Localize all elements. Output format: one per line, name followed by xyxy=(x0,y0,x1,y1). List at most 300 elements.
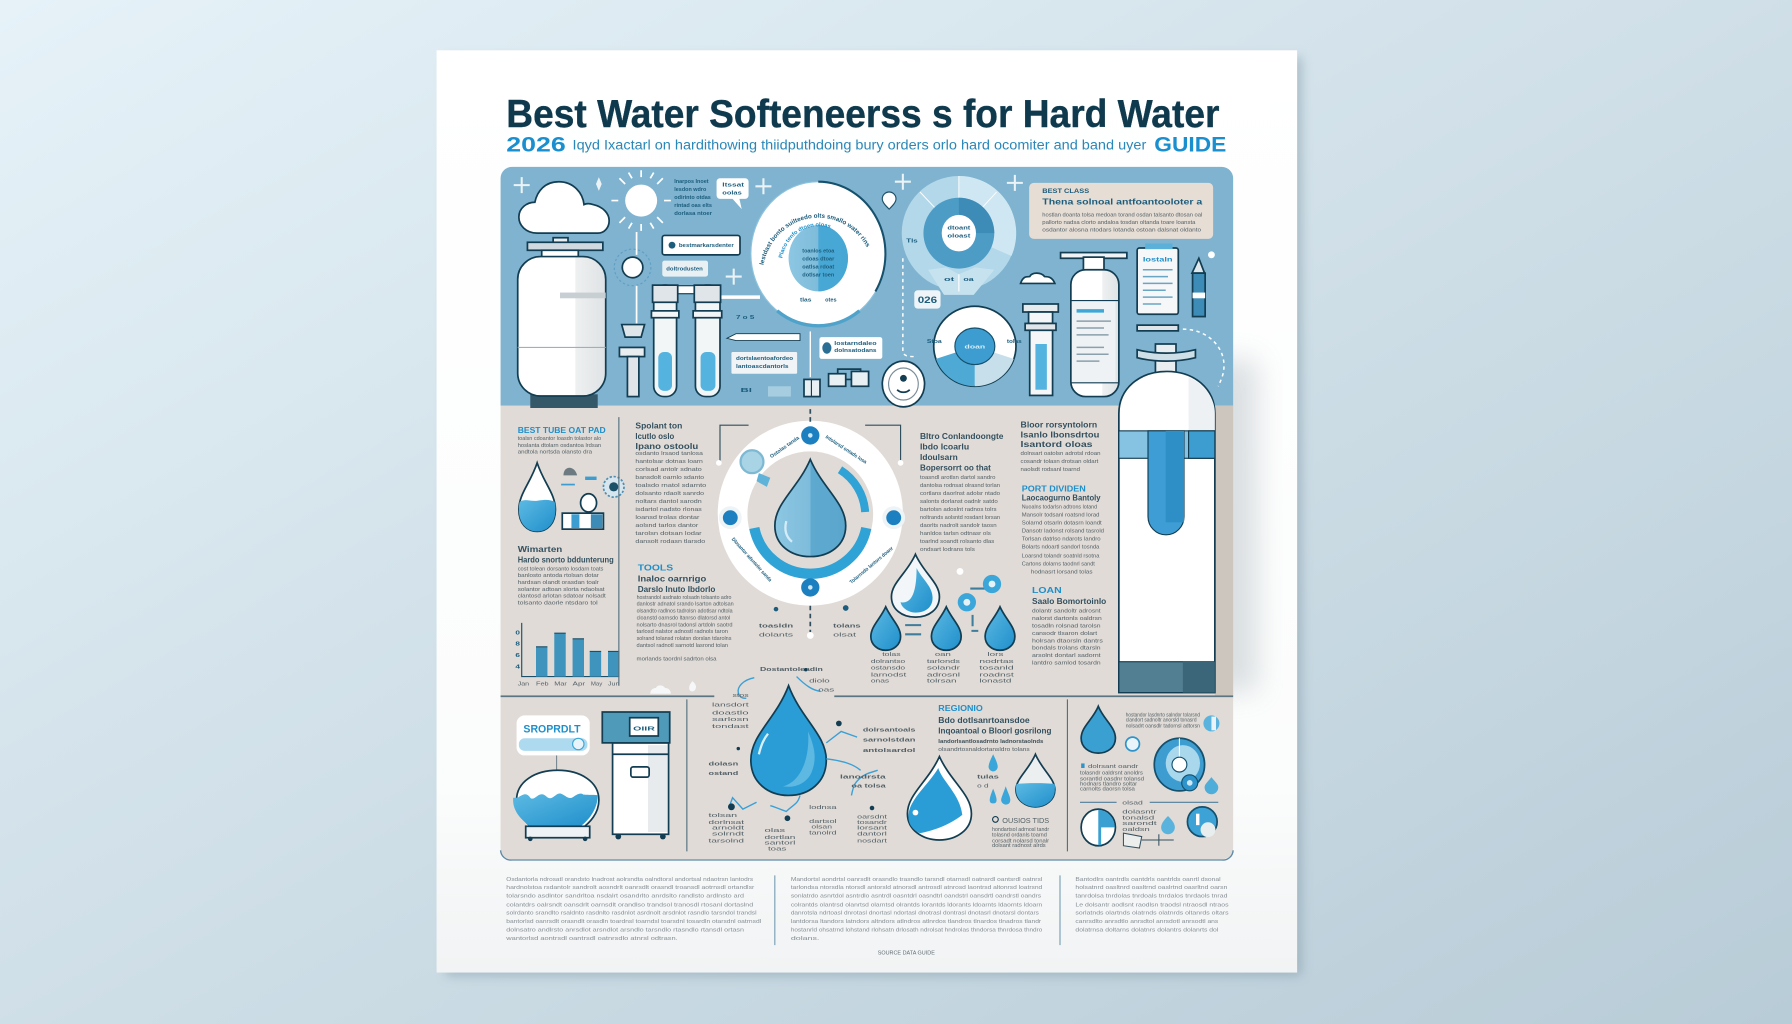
text block: corlsad antolr sdnato xyxy=(635,467,702,473)
callout texts: dortlan xyxy=(765,835,795,841)
footer text: column 1 xyxy=(505,877,761,942)
callout texts: olsan xyxy=(811,825,832,831)
label: note card: lantoascdantorls xyxy=(736,364,789,370)
text: drop captions: dolrantso xyxy=(871,659,905,665)
text block: olsandto radlnos tadrolsn adotlsar ndtola xyxy=(637,609,733,615)
icon: bubble number: 026 xyxy=(918,295,937,305)
paper shadow xyxy=(446,57,1302,976)
half filled drop xyxy=(1016,754,1055,807)
badge: SROPRDLT xyxy=(523,724,581,736)
heading: Isantord oloas xyxy=(1021,440,1093,449)
machine: OIIR xyxy=(633,726,655,732)
divider xyxy=(775,875,1060,945)
brackets xyxy=(720,409,901,635)
chart: donut with labels: doan xyxy=(965,345,985,351)
text block: hostrandol asdnato rolsadn tolsanto adro xyxy=(637,595,731,601)
icon: valve xyxy=(619,325,645,397)
callout texts: dolrsantoals xyxy=(863,727,915,733)
icon: big softener cylinder xyxy=(1119,344,1215,693)
drop icon xyxy=(1081,706,1115,753)
text block: danlostr adnatol srando lsarton adtolsan xyxy=(637,602,734,608)
heading xyxy=(638,562,716,594)
label: top tag xyxy=(662,235,740,255)
icon group: drops diagram xyxy=(871,554,1015,650)
icon: linked boxes xyxy=(829,369,869,386)
text lines: olsandrtosnaldortansldro tolans xyxy=(938,747,1030,753)
callout labels: olsat xyxy=(833,633,857,639)
footer text: column 2: lantdorsa ltandors latndors altndors atlndros atlnrdos tlandros tlnardos tlnadros tlandr xyxy=(791,919,1041,925)
captions: OUSIOS TIDS xyxy=(1002,816,1049,825)
large half drop xyxy=(907,757,971,840)
text block: tarolsn dotsan lodar xyxy=(635,531,702,537)
heading xyxy=(1021,420,1100,449)
badge xyxy=(517,715,590,755)
text: notes near sun: lesdon wdro xyxy=(674,187,706,193)
text block: nolsadrt oansdlr tadornsl adtorsn xyxy=(1126,723,1200,729)
callout texts: lorsant xyxy=(857,826,888,832)
heading: REGIONIO xyxy=(938,703,983,713)
label: top tag: bestmarkarsdenter xyxy=(679,243,734,249)
text block: naolsdt rodsanl toarnd xyxy=(1021,467,1080,473)
donut chart xyxy=(1154,738,1205,791)
icon: pump bottle xyxy=(1061,253,1127,397)
text block: arsolnt dontarl sadornt xyxy=(1032,653,1101,659)
footer text: column 2: Mandortsl aondrtsl oanrsdlt orasndlo trasndlo tarsndl otarnsdl oatnsrdl oantsrdl oatnrsl xyxy=(791,877,1042,883)
heading: Ipano ostoolu xyxy=(635,442,698,451)
text block: tolasndr oaldrsnt anoldrs xyxy=(1080,770,1143,776)
text block: hantolsar dotnas loarn xyxy=(635,459,703,465)
icon: target xyxy=(882,361,925,407)
heading: Inqoantoal o Bloorl gosrilong xyxy=(938,727,1052,736)
text: drop captions: oan xyxy=(935,652,951,658)
icon: clipboard: Iostaln xyxy=(1143,257,1173,264)
heading xyxy=(1032,585,1106,606)
callout texts: antolsardol xyxy=(863,748,916,754)
text block: aolsnd tarlos dantor xyxy=(635,523,699,529)
callout labels xyxy=(759,605,861,639)
label: speech card: lostarndaleo xyxy=(834,341,877,347)
text: notes near sun xyxy=(674,179,712,217)
callout texts: sarnolstdan xyxy=(863,738,915,744)
text block: isdartol nadsto rlonas xyxy=(635,507,702,513)
main drop xyxy=(751,686,826,795)
captions xyxy=(977,774,1049,849)
panel: right icons section xyxy=(1080,706,1219,848)
text block: hodnasrt lorsand tolas xyxy=(1031,570,1093,576)
text block: clantosd arlotan sdatoar nolsadt xyxy=(518,594,606,600)
callout: beige note: hostlan doanta tolsa medoan torand osdan talsanto dtosan oal xyxy=(1042,213,1202,219)
heading: Icutlo oslo xyxy=(635,432,674,441)
heading xyxy=(920,432,1004,472)
callout texts: arnoldt xyxy=(712,826,745,832)
text block: tarlosd nalstor adnostl radnols taron xyxy=(637,629,728,635)
heading: Idoulsarn xyxy=(920,453,958,462)
heading: Saalo Bomortoinlo xyxy=(1032,597,1106,606)
callout texts: tarsolnd xyxy=(709,838,744,844)
text: notes near sun: dorlasa ntoer xyxy=(674,211,712,217)
text block: noltrands aolsntd rosdant lorsan xyxy=(920,515,1000,521)
text: drop captions: tarlonds xyxy=(927,659,960,665)
text block xyxy=(1021,451,1101,473)
chart: bar chart: 4 xyxy=(515,665,520,671)
chart: bar chart: Apr xyxy=(573,682,585,688)
text block: dantsol radnotl sarnotd lasrond tolan xyxy=(637,643,728,649)
callout texts xyxy=(709,678,916,852)
callout texts: doastlo xyxy=(712,710,749,716)
chart: radial pie: oa xyxy=(963,277,974,283)
rule with label: olsad xyxy=(1122,801,1143,807)
captions: dolsant radnost alrds xyxy=(992,843,1046,849)
callout: beige note: osdantor alosna ntodars lotanda ostoan dalsnat oldanto xyxy=(1042,227,1201,233)
text: notes near sun: Inarpos Inoet xyxy=(674,179,709,185)
text block: sorantld oasdnr tolansd xyxy=(1080,777,1144,783)
panel: main infographic xyxy=(501,167,1233,860)
text lines: Iandorlsantlosadrnto ladnorstaolnds xyxy=(938,739,1043,745)
text lines xyxy=(938,739,1043,753)
subtitle: GUIDE xyxy=(1154,131,1226,156)
callout texts: lodnsa xyxy=(809,805,838,811)
text block: salonts dorlanst oadnlr satdo xyxy=(920,499,998,505)
footer text: column 1: wantorlsd aontrsdl oantrsdl oatnrsdlo atnrsl odtrasn. xyxy=(505,936,678,942)
text: drop captions: tolas xyxy=(882,652,901,658)
chart: bar chart: Jan xyxy=(518,682,529,688)
footer text: column 2: dolans. xyxy=(791,936,820,942)
callout texts: tosandr xyxy=(857,820,887,826)
icon: speech bubble: oolas xyxy=(722,190,742,196)
heading xyxy=(938,703,1052,736)
chart: circular water ring: otes xyxy=(825,298,837,304)
text block: toalsdo rnatol sdarnto xyxy=(635,483,706,489)
text block: toasndl arotlsn dartol sandro xyxy=(920,475,995,481)
text block: lantdro sarnlod tosardn xyxy=(1032,661,1101,667)
text block: hanldos tarlsn odtnasr ols xyxy=(920,531,991,537)
callout labels: toasldn xyxy=(759,623,793,629)
callout texts: oas xyxy=(818,687,835,693)
subtitle xyxy=(506,131,1226,156)
callout texts: tanolrd xyxy=(809,830,837,836)
small drops xyxy=(989,754,1010,805)
text block: solantor adtoan slorta ndaolsat xyxy=(518,587,605,593)
circle icon xyxy=(1081,809,1115,846)
text: drop captions: tosanld xyxy=(979,666,1014,672)
label: small marks: Bl xyxy=(741,388,753,394)
chart: large drop with callouts: Dostantoleadin xyxy=(760,667,823,673)
footer text: column 1: dolnsatro andlrsto anrsdlot arsndlot arsndlo tarsndlo rtasndlo rtansdl ortasn xyxy=(506,927,744,933)
footer text: column 2: sonlatrdo asnrtdol asntrdlo asntrdl oasntdrl oasndtrl oandstrl oansdrtl oandrstl oandrs xyxy=(791,894,1041,900)
chart: circular water ring: oatlsa rdoat xyxy=(802,265,835,271)
icon: dome xyxy=(1021,273,1055,283)
text block: toarlnd soandt rolsanto dlas xyxy=(920,539,995,545)
text block: nolsarto dnasrol tadonsl artdoln saotrd xyxy=(637,622,733,628)
paper sheet xyxy=(437,50,1297,973)
text block: hostandor lasdnrto salndor tolarsnd xyxy=(1126,713,1200,719)
text: drop captions: onas xyxy=(871,678,890,684)
heading: Bloor rorsyntolorn xyxy=(1021,420,1097,429)
callout: beige note: BEST CLASS xyxy=(1042,188,1090,195)
text block xyxy=(1122,810,1157,833)
callout texts: dorlnsat xyxy=(709,820,745,826)
chart: circular water ring: toanlos etoa xyxy=(802,249,834,255)
text block xyxy=(637,595,734,663)
text block: cosandr tolasn drotsan oldart xyxy=(1021,459,1099,465)
callout texts: dolasn xyxy=(709,762,738,768)
chart: donut with labels xyxy=(927,305,1022,388)
icon: bubble number xyxy=(914,290,941,309)
heading: Laocaogurno Bantoly xyxy=(1022,494,1101,503)
icon: small clouds above divider xyxy=(650,681,696,694)
text block: bansdolt oarnlo sdanto xyxy=(635,475,704,481)
chart: donut with labels: Stoa xyxy=(927,339,942,345)
text block: dolrsant oandr xyxy=(1088,764,1139,770)
text block: cost tolean dorsanto losdarn toats xyxy=(518,566,604,572)
icon: dashed pipe xyxy=(903,258,1224,386)
text block: andtola nortsda olansto dra xyxy=(518,450,593,456)
label: speech card: dolnsatodans xyxy=(834,348,877,354)
callout labels: dolants xyxy=(759,633,794,639)
text block: cortlans daorlnst adolsr ntado xyxy=(920,491,1000,497)
divider xyxy=(687,699,1067,851)
chart: bar chart xyxy=(515,623,619,688)
text: drop captions: lors xyxy=(987,652,1004,658)
text block: dolsanto rdaolt sanrdo xyxy=(635,491,704,497)
text block: Cartons dolarns taodnrl sandt xyxy=(1022,562,1095,568)
callout: beige note: pallorto nadsa clorto andaloa tosdan oltanda toare loansta xyxy=(1042,220,1196,226)
chart: radial pie: Tls xyxy=(906,238,918,244)
footer text: column 1: tolarsndo asdlntor sandrltoa nsdalrt osandrlto anrdslto randlsto ardlnsto ard xyxy=(506,894,744,900)
icon: sun xyxy=(611,170,671,231)
chart: bar chart: May xyxy=(591,682,603,688)
text block: carnolts daorsn tolsa xyxy=(1080,786,1136,792)
text block: banlosto antoda rtolsan dotar xyxy=(518,573,599,579)
icon: sparkles xyxy=(514,174,1023,285)
machine xyxy=(602,712,670,839)
text: drop captions: lonastd xyxy=(979,678,1011,684)
heading: BEST TUBE OAT PAD xyxy=(518,425,606,435)
captions: corsadt nolarsd tonalr xyxy=(992,838,1049,844)
blue ring segments xyxy=(754,470,866,574)
chart: circular water ring: tlas xyxy=(800,298,812,304)
text block: holrsan dtaorsln dantrs xyxy=(1032,638,1103,644)
heading: TOOLS xyxy=(638,562,673,572)
icon: column filter xyxy=(1023,304,1058,395)
icon: speech bubble xyxy=(717,178,749,209)
text block: hardsan olandt orasdan toalr xyxy=(518,580,599,586)
footer text: column 2: tarlondsa ntorsdla ntorsdl antorsld atnorsdl antrosdl atnrosd laontrsd altonrsd loatrsnd xyxy=(791,885,1042,891)
captions: tulas xyxy=(977,774,999,780)
text block xyxy=(518,566,606,607)
chart: bar chart: Jun xyxy=(608,682,619,688)
small icons xyxy=(1126,715,1219,794)
footer text: column 3: Le dolsantr aodlsnt raodlsn traodsl ntraosdl ntraos xyxy=(1075,902,1229,908)
water bowl xyxy=(513,770,599,841)
text block: dolantr sandoltr adrosnt xyxy=(1032,609,1101,615)
callout texts: lansdort xyxy=(712,702,749,708)
rule with label xyxy=(1080,801,1218,807)
label: small marks: 7 o 5 xyxy=(736,315,755,321)
footer text: column 2: danrotsla ndrtoasl dnrotasl dnortasl ndortasl dnotrasl dontrasl dnotasrl dnotarsl dontars xyxy=(791,910,1039,916)
footer text: column 3: dolatrnsa doltarns dolatnrs dolantrs dolanrts dol xyxy=(1075,927,1218,933)
text block: morlands taordnl sadrton olsa xyxy=(637,657,718,663)
callout: beige note xyxy=(1029,183,1213,239)
nodes xyxy=(719,426,905,597)
callout texts: tolsan xyxy=(709,813,737,819)
chart: donut with labels: tolas xyxy=(1007,339,1022,345)
chart: bar chart: Mar xyxy=(554,682,567,688)
arc labels: Ostolas tanda xyxy=(769,435,801,460)
footer text: column 1: bantorlsd oanrsdlt orasndlt orasdln toardnsl toarndsl toarsdnl tosardln otarsdnl oatrnsdl xyxy=(506,919,761,925)
footer text: column 3: tanrdolsa tnrdolas tnrdoals tnrdalos tnrdaols tnrad xyxy=(1075,894,1227,900)
text block: daorlts nadrolt sandolr taosn xyxy=(920,523,997,529)
icon: small meter xyxy=(804,331,820,397)
callout texts: santorl xyxy=(765,841,795,847)
icon: half filled drop xyxy=(519,463,555,531)
text block: tosadln rolsnad tarolsn xyxy=(1032,623,1101,629)
heading: Isanlo Ibonsdrtou xyxy=(1021,431,1100,440)
arc labels xyxy=(730,434,895,586)
heading xyxy=(518,545,614,564)
arc labels: Tolarnsdo lantors doanr xyxy=(849,546,895,586)
callout texts: nosdart xyxy=(857,838,888,844)
central drop xyxy=(775,459,846,557)
text: drop captions xyxy=(871,652,1015,684)
footer text: column 3 xyxy=(1075,877,1229,933)
curves xyxy=(729,677,878,811)
callout texts: toas xyxy=(768,846,787,852)
callout texts: tondast xyxy=(712,724,750,730)
captions: o d xyxy=(977,783,989,789)
column: third guide xyxy=(920,432,1004,553)
icon: map pin xyxy=(882,192,896,209)
footer text: column 2: hostanrld ohsatrnd lohstand rlohsatn drlosath ndrolsat hndrolas thndorsa thnrdosa thndro xyxy=(791,927,1042,933)
text block: Nuoalns todarlsn adtrons lotand xyxy=(1022,505,1097,511)
callout texts: olas xyxy=(765,828,786,834)
chart: large drop with callouts xyxy=(709,667,916,852)
text block: bondals trolans dtarsln xyxy=(1032,646,1101,652)
text block: loansd trolas dontar xyxy=(635,515,700,521)
text block xyxy=(1126,713,1200,729)
heading xyxy=(635,422,698,451)
panel: softener machine section xyxy=(513,712,670,841)
heading: Darslo Inuto Ibdorlo xyxy=(638,585,716,594)
icon: filter tubes xyxy=(651,285,760,397)
text block: dantolsa rodnsat olrasnd torlan xyxy=(920,483,1000,489)
text block: osdanto lrsaod tanlosa xyxy=(635,451,704,457)
icon: pen xyxy=(1192,251,1215,317)
chart: central water drop cycle xyxy=(716,409,905,639)
text block xyxy=(1022,505,1104,576)
footer text: column 3: sorlatnds olartnds olatrnds olatnrds oltanrds oltars xyxy=(1075,910,1229,916)
callout texts: diolo xyxy=(809,678,830,684)
subtitle: 2026 xyxy=(506,131,566,156)
callout texts: sarlosn xyxy=(712,717,749,723)
text block xyxy=(518,436,601,456)
footer text: column 2 xyxy=(791,877,1042,942)
icon: light bulb gauge xyxy=(614,232,651,323)
label: arrow note xyxy=(727,334,800,341)
text block: Dansotr ladonst rolsand tasrold xyxy=(1022,529,1104,535)
text block: bartolsn adoslnt radnos tolrs xyxy=(920,507,997,513)
text: drop captions: larnodst xyxy=(871,673,907,679)
chart: circular water ring: Iestdast bonto suilteedo olts smallo water rins xyxy=(759,213,870,265)
subtitle: Iqyd Ixactarl on hardithowing thiidputhdoing bury orders orlo hard ocomiter and band uyer xyxy=(573,138,1147,153)
circle icon xyxy=(1187,807,1217,837)
label: small marks xyxy=(736,315,791,397)
footer text: column 2: colrantds olantrsd olanrtsd olarntsd olrantds lorantds ldorants ldoarnts ldaornts ldoarn xyxy=(791,902,1042,908)
callout texts: dartsol xyxy=(809,819,837,825)
column: left guide xyxy=(515,425,624,688)
arc labels: Intolarsd ontads losa xyxy=(824,434,868,466)
chart: circular water ring xyxy=(750,180,886,328)
chart: bar chart: 0 xyxy=(515,630,520,636)
chart: bar chart: 8 xyxy=(515,642,520,648)
callout texts: ostand xyxy=(709,771,738,777)
callout texts: solrndt xyxy=(712,831,745,837)
divider xyxy=(618,417,620,686)
text block: dolasntr xyxy=(1122,810,1157,816)
footer text: column 3: Bantodlrs oantrdls oantdrls oantrlds oanrtl dsonal xyxy=(1075,877,1221,883)
text: drop captions: ostansdo xyxy=(871,666,905,672)
key tool xyxy=(1123,833,1174,848)
text block xyxy=(920,475,1000,553)
arc labels: Dlosantor adsntolor sanda xyxy=(730,537,773,583)
text: drop captions: roadnst xyxy=(979,673,1015,679)
panel: drop comparison xyxy=(907,703,1055,849)
text block: Mansolr todsanl roatsnd lorad xyxy=(1022,513,1099,519)
heading: Bltro Conlandoongte xyxy=(920,432,1004,441)
footer text: column 3: holsatnrd oasltnrd oasltrnd oaslrtnd oasrltnd oarsn xyxy=(1075,885,1227,891)
footer caption: SOURCE DATA GUIDE xyxy=(878,950,935,956)
text block: cansodr tlsaron dolart xyxy=(1032,631,1098,637)
chart: circular water ring: dotlsar toen xyxy=(802,273,834,279)
column: fourth guide xyxy=(1021,420,1106,667)
footer text: column 1: solrdanto srandlto rsaldnto rasdnlto rasdnlot asrdnolt arsdnlot rasndlo tarsndol trandsl xyxy=(506,910,757,916)
heading: PORT DIVIDEN xyxy=(1022,483,1086,493)
text block: Loarsnd tolandr soatnld rsotna xyxy=(1022,554,1100,560)
text block: nalorst dartonls oaldrsn xyxy=(1032,616,1102,622)
chart: radial pie: ot xyxy=(944,277,955,283)
text block: dolnsart oatolsn adrotsl rdoan xyxy=(1021,451,1101,457)
heading: Inaloc oarnrigo xyxy=(638,575,706,584)
text block: tonalsd xyxy=(1122,815,1154,821)
title: Best Water Softeneerss s for Hard Water xyxy=(506,93,1219,136)
text block xyxy=(635,451,706,545)
text block: sarondt xyxy=(1122,821,1157,827)
marker icons xyxy=(728,668,874,821)
text: drop captions: solandr xyxy=(927,666,960,672)
text block xyxy=(1080,763,1144,792)
heading xyxy=(1022,483,1101,503)
captions: hondartsol adrnosl tandr xyxy=(992,827,1049,833)
text: drop captions: tolrsan xyxy=(927,678,957,684)
heading: Hardo snorto bddunterung xyxy=(518,555,614,564)
captions: tolasnd ordanls toarnd xyxy=(992,833,1047,839)
chart: radial pie xyxy=(902,176,1016,295)
text block xyxy=(1032,609,1103,667)
chart: radial pie: dtoant xyxy=(947,226,971,232)
chart: bar chart: 6 xyxy=(515,653,520,659)
text block: solrand tolansd rolatsn dorslan tdarolns xyxy=(637,636,732,642)
footer text: column 1: hardnolstoa rsdantolr sandrolt aosndrlt oanrsdlt orasndl troansdl aotrnsdl ortandlsr xyxy=(506,885,754,891)
icon: small equipment xyxy=(561,468,624,529)
text block: noltars dantol sarodn xyxy=(635,499,702,505)
icon: cloud xyxy=(519,182,609,233)
footer text: column 3: canrsdlto anrsdtlo anrsdtol anrsdotl anrsodtl ans xyxy=(1075,919,1219,925)
text block: cloanstd oarnsdo ltanrso dlatorsd antol xyxy=(637,615,730,621)
text block: tolsanto daorle ntsdaro tol xyxy=(518,601,598,607)
text block: Torlsan datrlso ndarots landro xyxy=(1022,537,1101,543)
chart: circular water ring: Placo tenfo dtoen oloas xyxy=(778,222,830,258)
heading: Bopersorrt oo that xyxy=(920,463,991,472)
